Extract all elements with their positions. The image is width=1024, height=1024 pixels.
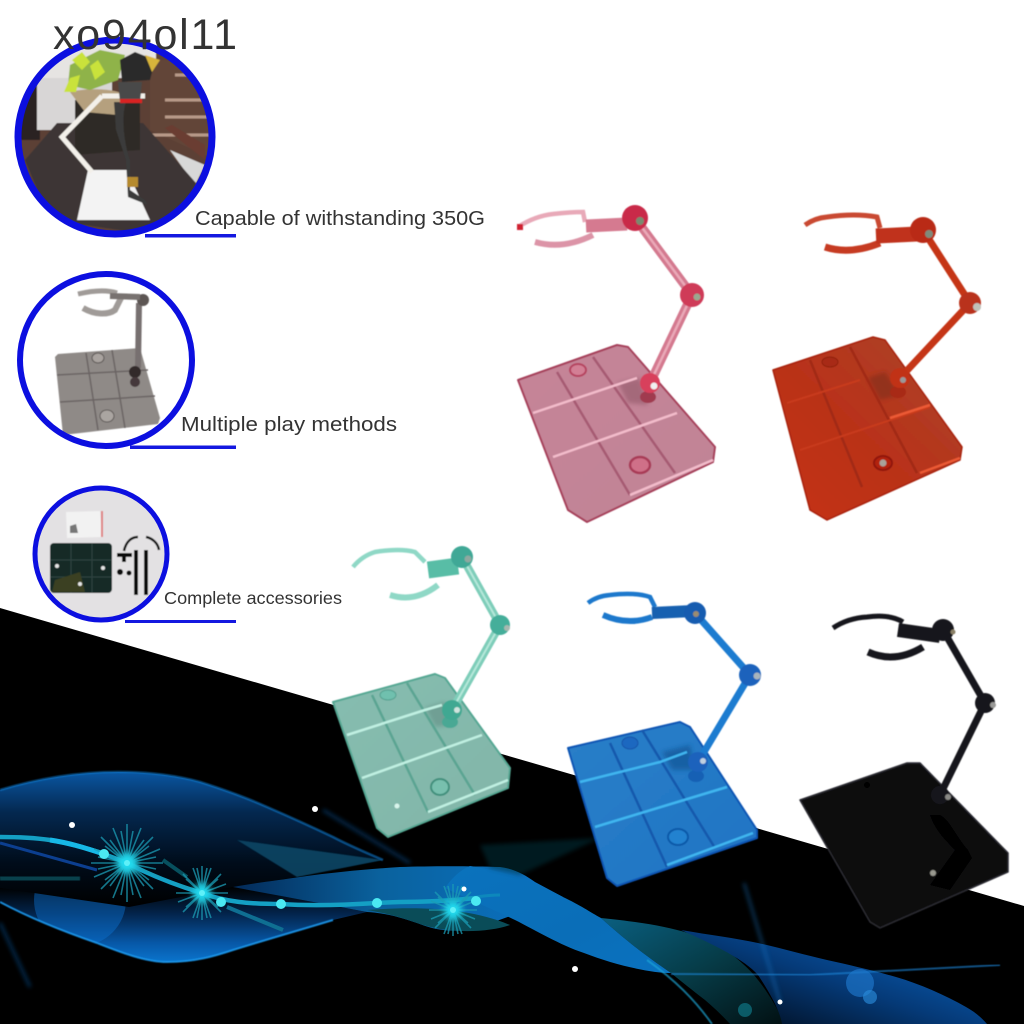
leader line [145,234,236,238]
stand: black [800,616,1008,928]
watermark: xo94ol11 [53,11,237,59]
circle 2: grey stand [20,274,236,449]
stand: red [773,215,981,520]
white sparkles [69,806,782,1004]
lens flare on lower ribbon [34,893,126,942]
background: black diagonal lower area [0,608,1024,1024]
label: capable: Capable of withstanding 350G [195,207,485,230]
stand: teal [333,546,510,837]
leader line [130,446,236,449]
light nodes [99,849,481,913]
light wave graphic [0,772,1000,1024]
leader line [125,620,236,623]
label: multiple: Multiple play methods [181,413,397,436]
stand: pink [517,205,715,522]
stand: blue [568,594,761,886]
circle 3: accessories [33,486,236,623]
circle 1: figure on stand [15,37,236,238]
label: complete: Complete accessories [164,588,342,608]
starbursts [91,824,477,936]
